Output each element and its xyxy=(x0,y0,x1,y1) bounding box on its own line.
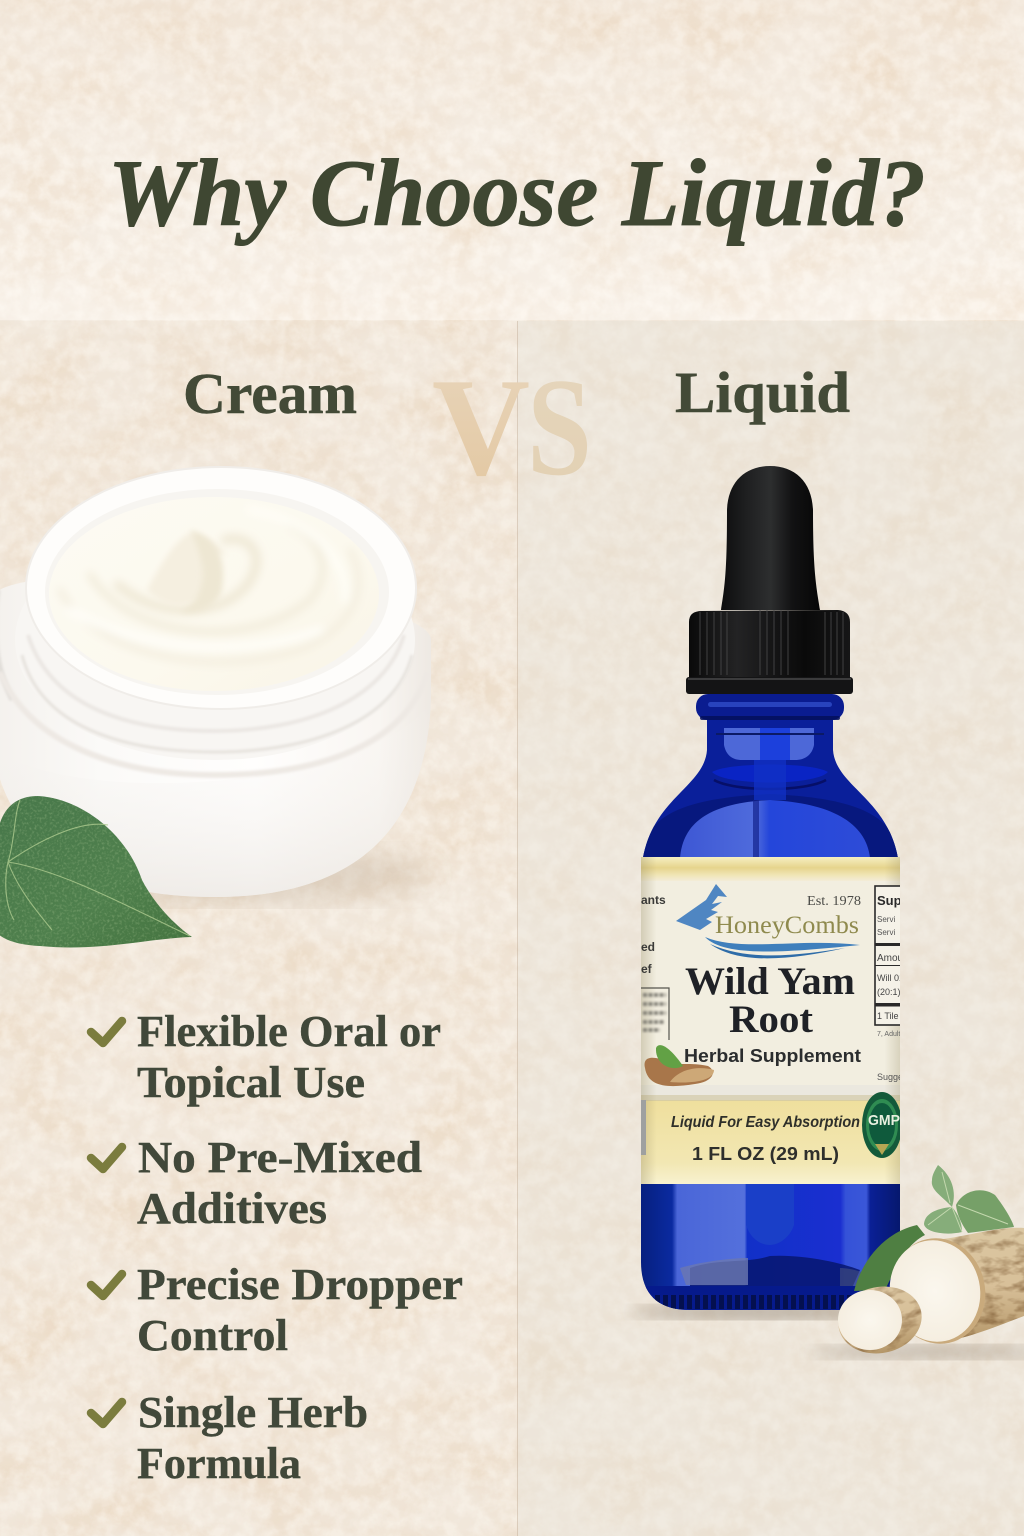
supplement facts box: Will 01 xyxy=(877,973,904,983)
neck lip xyxy=(696,694,844,720)
shoulder reflection xyxy=(680,800,870,858)
supplement facts box: Sup xyxy=(877,893,902,908)
neck reflection xyxy=(724,728,814,760)
product label xyxy=(641,857,910,1184)
leaves xyxy=(854,1165,1014,1291)
item: single herb: Formula xyxy=(137,1439,301,1488)
product name xyxy=(686,967,854,1032)
cream swirl xyxy=(49,497,379,691)
supplement facts box: Servi xyxy=(877,915,895,924)
left side panel text: ef xyxy=(641,962,653,976)
VS watermark: V xyxy=(432,350,530,505)
item: single herb: Single Herb xyxy=(138,1388,368,1437)
illustration: yam and leaf xyxy=(645,1045,714,1086)
supplement facts box xyxy=(874,885,900,1082)
heading: Liquid: Liquid xyxy=(675,360,850,425)
item: oral or topical xyxy=(91,1007,441,1107)
title: Why Choose Liquid? xyxy=(108,140,926,246)
item: no additives xyxy=(91,1133,422,1233)
inner threaded collar xyxy=(15,520,415,760)
VS watermark: S xyxy=(527,350,592,505)
item: oral or topical: Topical Use xyxy=(137,1058,365,1107)
text: easy absorption: Liquid For Easy Absorption xyxy=(671,1114,860,1131)
badge: GMP certified: GMP xyxy=(868,1112,900,1129)
jar lower body xyxy=(0,577,431,897)
left side panel text: ed xyxy=(641,940,655,954)
item: oral or topical: Flexible Oral or xyxy=(137,1007,441,1056)
glass body xyxy=(641,715,900,1313)
item: dropper control: Precise Dropper xyxy=(137,1260,463,1309)
supplement facts box: Sugge xyxy=(877,1072,903,1082)
item: no additives: No Pre-Mixed xyxy=(138,1133,422,1182)
supplement facts box: 1 Tile xyxy=(877,1011,899,1021)
item: dropper control: Control xyxy=(137,1311,288,1360)
supplement facts box: (20:1) xyxy=(877,987,901,997)
supplement facts box: 7, Adult xyxy=(877,1031,900,1038)
lower glass reflections xyxy=(746,1183,794,1245)
logo: brand name: HoneyCombs xyxy=(715,912,859,939)
text: volume: 1 FL OZ (29 mL) xyxy=(692,1143,839,1164)
blurred small print xyxy=(645,1096,880,1100)
text: herbal supplement: Herbal Supplement xyxy=(684,1045,861,1066)
image: wild yam root and leaves xyxy=(810,1165,1024,1361)
supplement facts box: Servi xyxy=(877,928,895,937)
product name: Wild Yam xyxy=(685,960,855,1003)
dropper cap xyxy=(686,610,853,694)
logo: mountain and waves xyxy=(676,884,860,958)
VS watermark xyxy=(432,350,592,505)
supplement facts box: Amou xyxy=(877,953,903,964)
icon: green leaf xyxy=(0,796,192,947)
image: blue dropper bottle xyxy=(630,466,910,1319)
product name: Root xyxy=(729,998,813,1041)
badge: GMP certified xyxy=(862,1092,902,1158)
item: dropper control xyxy=(91,1260,463,1360)
jar rim xyxy=(26,467,416,709)
left side panel text xyxy=(641,893,669,1155)
image: cream jar xyxy=(0,467,431,903)
dropper bulb xyxy=(721,466,820,610)
small yam slice xyxy=(832,1279,928,1361)
item: no additives: Additives xyxy=(137,1184,327,1233)
checklist: benefits xyxy=(91,1007,463,1488)
heading: Cream: Cream xyxy=(183,361,357,426)
large yam piece xyxy=(880,1228,1024,1353)
text: established: Est. 1978 xyxy=(807,893,861,908)
item: single herb xyxy=(91,1388,368,1488)
left side panel text: ants xyxy=(641,893,666,907)
